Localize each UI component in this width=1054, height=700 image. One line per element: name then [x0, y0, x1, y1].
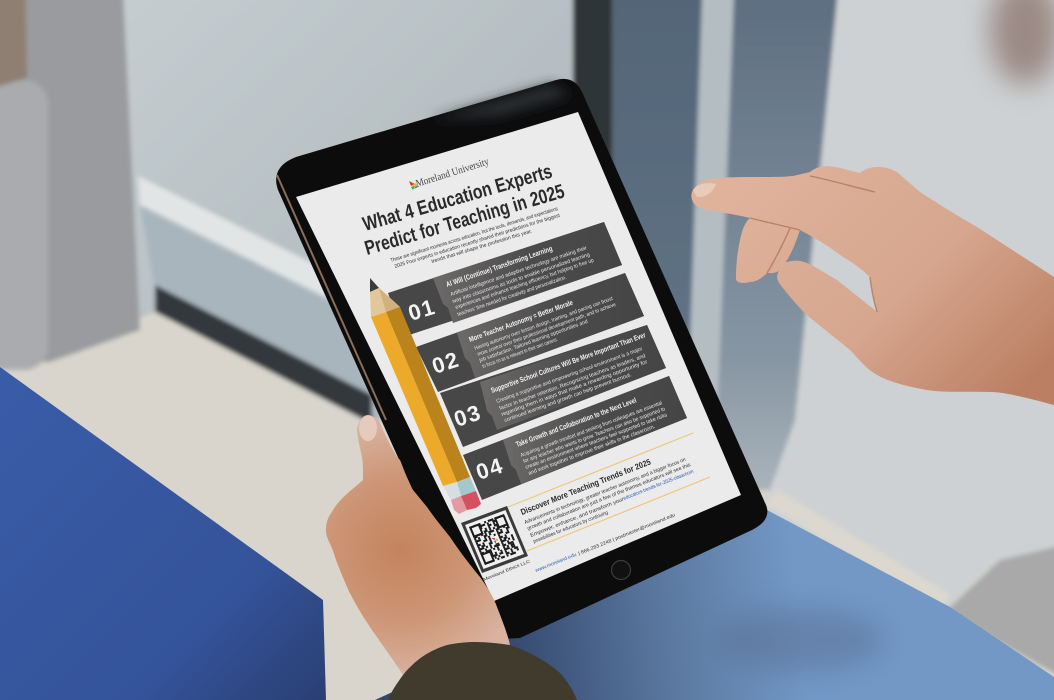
- bar 03: Supportive School Cultures Will Be More Important Than Ever: [490, 330, 647, 395]
- intro text: 2025 Four experts in education recently shared their predictions for the biggest: [394, 213, 561, 270]
- footer text: | 866.283.2248 | postmaster@moreland.edu: [578, 512, 677, 557]
- bar 02: [416, 273, 644, 392]
- bar 01: 01: [405, 294, 437, 326]
- bar 03: regarding them in ways that make a rewarding opportunity for: [501, 359, 649, 418]
- footer text: www.moreland.edu: [535, 552, 578, 574]
- title: What 4 Education Experts: [360, 161, 555, 236]
- bar 04: create an environment where teachers feel supported to take risks: [525, 412, 668, 471]
- bar 02: to focus on as is relevant to their own careers.: [482, 337, 559, 370]
- bar 04: 04: [473, 453, 506, 485]
- bar 01: AI Will (Continue) Transforming Learning: [445, 244, 554, 289]
- left hand holding tablet: [326, 415, 577, 700]
- bar 02: 02: [429, 347, 461, 379]
- intro text: These are significant moments across education, but the tools, demands, and expectations: [390, 206, 559, 264]
- blue box: [0, 367, 326, 700]
- bar 04: Take Growth and Collaboration to the Next Level: [515, 396, 638, 449]
- QR code: [461, 506, 528, 573]
- column: [573, 0, 615, 430]
- floor: [0, 312, 430, 700]
- bar 04: [463, 376, 687, 500]
- bar 02: More Teacher Autonomy = Better Morale: [468, 298, 574, 344]
- bar 01: Artificial intelligence and adaptive technology are making their: [450, 245, 588, 298]
- bar 01: teachers' time needed for creativity and personalization.: [457, 275, 567, 318]
- bar 01: experiences and enhance teaching efficiency, but helping to free up: [455, 258, 595, 311]
- title: Predict for Teaching in 2025: [362, 181, 567, 260]
- discover more section: possibilities for educators by continuing: [533, 510, 609, 545]
- divider lines: [508, 433, 710, 551]
- bar 03: [440, 325, 666, 447]
- screen page: [296, 112, 741, 601]
- chair: [0, 0, 140, 362]
- bar 01: way into classrooms as tools to enable personalized learning: [451, 252, 591, 305]
- discover more section: growth and collaboration are just a few of the themes educators will see this: [527, 462, 692, 532]
- bar 03: factor in teacher retention. Recognizing teachers as leaders, and: [499, 353, 646, 412]
- bar 04: Acquiring a growth mindset and seeking from colleagues are essential: [520, 400, 663, 459]
- discover more section: Empower, enhance, and transform your: [530, 497, 625, 539]
- jeans: [375, 510, 1054, 700]
- footer text: [483, 512, 677, 582]
- tablet body: [276, 79, 767, 640]
- intro text: trends that will shape the profession this year.: [431, 228, 533, 265]
- bar 03: continued learning and growth can help prevent burnout.: [504, 372, 633, 424]
- discover more section: educators-trends-for-2025-classroom: [623, 469, 695, 502]
- blurred foliage top right: [990, 0, 1054, 85]
- sleeve: [388, 642, 577, 700]
- fingernail: [693, 183, 716, 197]
- bar 01: [388, 222, 622, 337]
- pencil: [370, 278, 481, 514]
- bar 02: Having autonomy over lesson design, training, and pacing can boost: [474, 296, 614, 352]
- bright window at right: [760, 0, 1054, 640]
- discover more section: Advancements in technology, greater teacher autonomy, and a bigger focus on: [524, 457, 687, 526]
- bar 03: 03: [451, 400, 483, 432]
- bar 04: and work together to improve their skills in the classroom.: [528, 424, 656, 477]
- bar 02: more control over their professional development path, and to achieve: [477, 302, 617, 358]
- page contents: [360, 156, 710, 582]
- window: [110, 0, 585, 420]
- home button: [612, 560, 630, 580]
- bar 04: for any teacher who wants to grow. Teachers can also be supported to: [523, 406, 666, 465]
- discover more section: Discover More Teaching Trends for 2025: [519, 457, 652, 517]
- thumbnail: [359, 415, 377, 441]
- bar 02: job satisfaction. Tailored learning opportunities and: [478, 319, 589, 364]
- bar 03: Creating a supportive and empowering school environment is a major: [496, 346, 644, 405]
- footer text: Moreland Ethics LLC: [483, 559, 531, 582]
- finger creases: [750, 176, 877, 312]
- logo: Moreland University: [415, 156, 491, 190]
- right hand pointing: [691, 166, 1054, 405]
- tablet: [276, 79, 767, 640]
